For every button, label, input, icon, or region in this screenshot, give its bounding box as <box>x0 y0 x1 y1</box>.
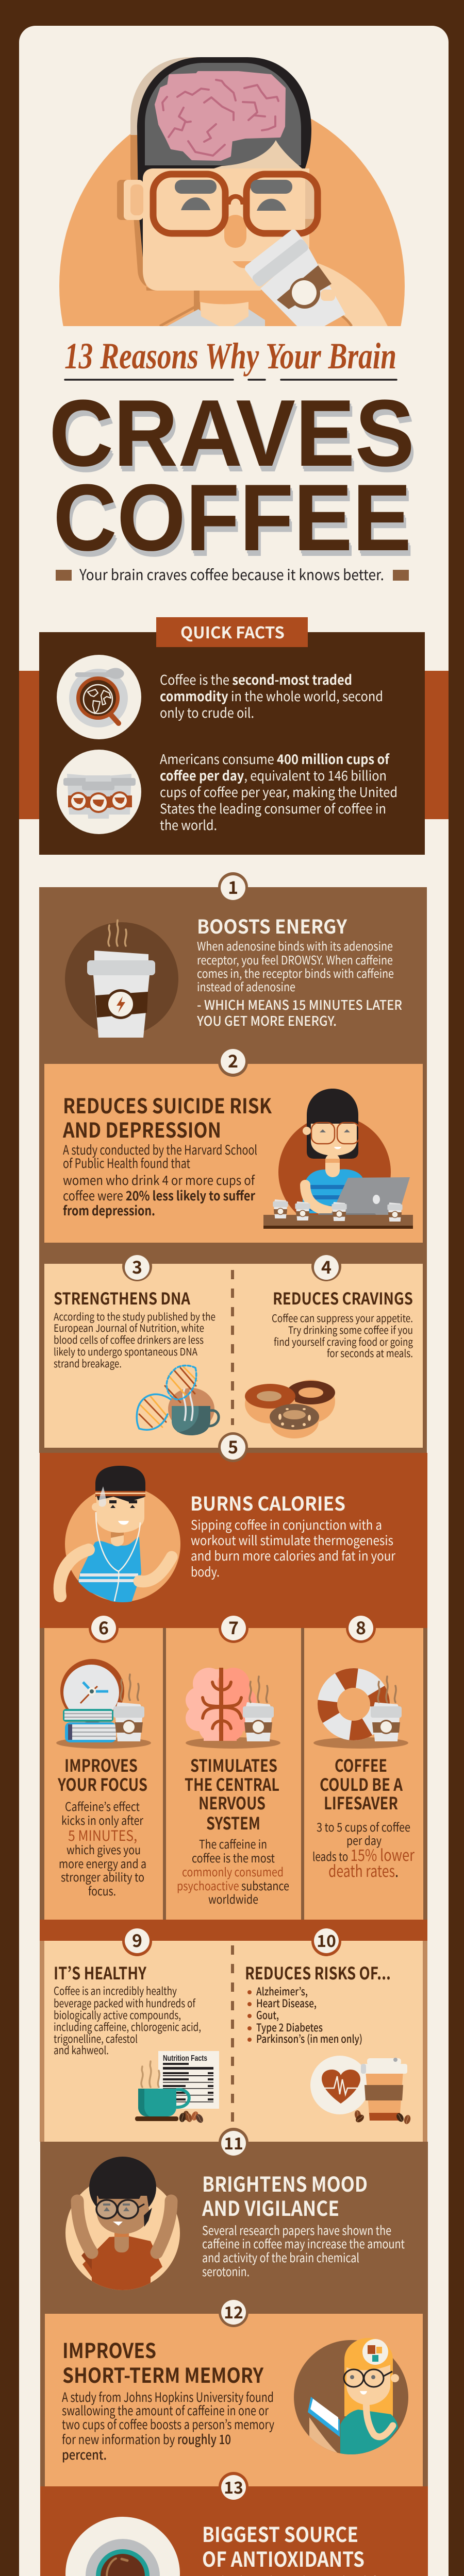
icon: world coffee cup <box>57 655 141 739</box>
heading and text: focus: IMPROVES <box>64 1752 138 1777</box>
text: strengthens DNA: blood cells of coffee drinkers are less <box>54 1332 204 1347</box>
text: burns calories: workout will stimulate thermogenesis <box>191 1531 393 1549</box>
text: reduces cravings: Try drinking some coffee if you <box>288 1322 413 1337</box>
badge 4: 4 <box>321 1253 332 1279</box>
heading and text: lifesaver: death rates. <box>328 1858 399 1882</box>
glasses <box>153 174 318 233</box>
badge 4 <box>311 1251 341 1281</box>
text: reduces risks list: Alzheimer’s, <box>256 1984 308 1999</box>
title CRAVES: CRAVES <box>52 385 417 492</box>
illustration: runner with headphones <box>60 1466 180 1602</box>
badge 8: 8 <box>356 1614 366 1639</box>
text: reduces suicide risk: AND DEPRESSION <box>62 1114 221 1144</box>
heading and text: central nervous system: THE CENTRAL <box>185 1771 279 1796</box>
columns background <box>40 1628 427 1920</box>
heading and text: central nervous system: The caffeine in <box>199 1835 267 1852</box>
text: strengthens DNA <box>54 1286 216 1370</box>
badge 5 <box>218 1432 248 1462</box>
text: strengthens DNA: strand breakage. <box>54 1355 122 1370</box>
panel: reasons 3 and 4 <box>44 1264 423 1448</box>
heading and text: focus: stronger ability to <box>61 1868 144 1885</box>
text: reduces cravings <box>272 1286 413 1360</box>
text: 400 million cups <box>160 749 397 834</box>
text: antioxidants: OF ANTIOXIDANTS <box>202 2543 364 2573</box>
heading and text: lifesaver: COULD BE A <box>320 1771 403 1796</box>
illustration: woman reading <box>294 2338 408 2454</box>
text: it's healthy: trigonelline, cafestol <box>54 2031 138 2046</box>
badge 13: 13 <box>224 2475 243 2499</box>
badge 3: 3 <box>132 1253 142 1279</box>
illustration: happy person arms up <box>65 2157 180 2293</box>
title COFFEE: COFFEE <box>53 464 411 570</box>
text: reduces risks list: Type 2 Diabetes <box>256 2020 323 2035</box>
heading and text: focus <box>57 1752 147 1899</box>
badge 1 <box>218 872 248 902</box>
text: strengthens DNA: likely to undergo spontaneous DNA <box>54 1344 198 1359</box>
text: brightens mood: AND VIGILANCE <box>202 2192 339 2222</box>
text: it's healthy: beverage packed with hundreds of <box>54 1995 196 2011</box>
text: 400 million cups: Americans consume 400 million cups of <box>160 749 390 768</box>
text: boosts energy: YOU GET MORE ENERGY. <box>196 1011 337 1030</box>
text: strengthens DNA: European Journal of Nutrition, white <box>54 1320 204 1335</box>
badge 13 <box>219 2472 248 2502</box>
panel: quick facts: QUICK FACTS <box>180 620 285 643</box>
text: second most traded: only to crude oil. <box>160 703 254 722</box>
text: antioxidants: BIGGEST SOURCE <box>202 2518 358 2548</box>
text: reduces cravings: for seconds at meals. <box>327 1345 413 1360</box>
text: second most traded: commodity in the whole world, second <box>160 686 383 705</box>
text: improves memory <box>62 2334 274 2464</box>
panel: reason 13 <box>40 2486 428 2576</box>
title CRAVES: CRAVES <box>51 383 416 489</box>
text: boosts energy: - WHICH MEANS 15 MINUTES LATER <box>197 995 402 1014</box>
badge 7: 7 <box>228 1614 239 1639</box>
badge 11 <box>219 2128 248 2158</box>
subtitle: Your brain craves coffee because it knows better. <box>79 563 384 585</box>
text: brightens mood: serotonin. <box>202 2262 250 2280</box>
text: reduces suicide risk: from depression. <box>63 1201 155 1219</box>
text: boosts energy: When adenosine binds with its adenosine <box>197 937 393 954</box>
text: brightens mood: BRIGHTENS MOOD <box>202 2168 368 2198</box>
icon: brain and cup <box>186 1668 280 1749</box>
badge 9: 9 <box>132 1927 142 1952</box>
text: it's healthy: Coffee is an incredibly healthy <box>54 1983 177 1998</box>
text: it's healthy: biologically active compounds, <box>54 2007 181 2023</box>
text: improves memory: percent. <box>62 2445 107 2464</box>
quick facts band <box>19 671 449 819</box>
icon: energy coffee cup <box>65 920 178 1038</box>
illustration: coffee cup top view <box>65 2517 180 2576</box>
text: improves memory: for new information by roughly 10 <box>62 2430 231 2448</box>
panel: reason 6 <box>44 1628 163 1920</box>
text: brightens mood <box>202 2168 405 2280</box>
badge 10 <box>311 1926 341 1956</box>
text: reduces risks list: Parkinson’s (in men only) <box>256 2031 362 2046</box>
badge 12 <box>219 2297 248 2327</box>
panel: reasons 9 and 10 <box>40 1941 427 2142</box>
heading and text: central nervous system: SYSTEM <box>206 1810 260 1835</box>
badge 6: 6 <box>98 1614 109 1639</box>
text: reduces cravings: Coffee can suppress your appetite. <box>272 1310 413 1325</box>
heading and text: lifesaver <box>312 1752 415 1882</box>
badge 8 <box>346 1613 376 1643</box>
brain <box>156 73 284 159</box>
panel: quick facts <box>39 617 425 855</box>
badge 9 <box>122 1926 152 1956</box>
text: boosts energy: receptor, you feel DROWSY. When caffeine <box>197 951 393 968</box>
heading and text: focus: YOUR FOCUS <box>57 1771 147 1796</box>
text: improves memory: swallowing the amount of caffeine in one or <box>62 2401 269 2419</box>
heading and text: lifesaver: LIFESAVER <box>324 1790 398 1815</box>
panel: reason 12 <box>45 2314 423 2486</box>
text: boosts energy: comes in, the receptor binds with caffeine <box>197 964 394 981</box>
text: boosts energy <box>196 911 402 1030</box>
text: 400 million cups: States the leading consumer of coffee in <box>160 799 386 818</box>
heading and text: central nervous system: psychoactive substance <box>177 1876 289 1894</box>
text: antioxidants <box>202 2518 415 2576</box>
heading and text: central nervous system: STIMULATES <box>190 1752 277 1777</box>
text: improves memory: IMPROVES <box>62 2334 156 2364</box>
heading and text: lifesaver: 3 to 5 cups of coffee <box>317 1818 410 1835</box>
icon: lifesaver and cup <box>313 1673 408 1749</box>
text: second most traded: Coffee is the second-most traded <box>160 670 352 689</box>
heading and text: focus: focus. <box>88 1882 116 1899</box>
hero illustration: man with brain and coffee <box>59 57 405 326</box>
text: reduces cravings: find yourself craving food or going <box>274 1334 413 1349</box>
text: it's healthy: including caffeine, chlorogenic acid, <box>54 2019 201 2035</box>
text: strengthens DNA: STRENGTHENS DNA <box>54 1286 190 1310</box>
badge 1: 1 <box>228 874 238 899</box>
text: burns calories: BURNS CALORIES <box>190 1488 345 1516</box>
panel: reason 11 background <box>40 2142 428 2486</box>
heading and text: central nervous system: coffee is the most <box>192 1849 275 1866</box>
text: burns calories: and burn more calories and fat in your <box>191 1546 395 1565</box>
text: it's healthy <box>54 1960 201 2058</box>
section background: orange 5-10 <box>40 1453 427 1941</box>
badge 3 <box>122 1251 152 1281</box>
heading and text: focus: 5 MINUTES, <box>68 1825 137 1845</box>
heading and text: lifesaver: COFFEE <box>335 1752 387 1777</box>
heading and text: focus: Caffeine’s effect <box>65 1797 140 1815</box>
text: burns calories: Sipping coffee in conjunction with a <box>191 1515 382 1534</box>
section background: brown 1-5 <box>39 887 427 1453</box>
text: brightens mood: Several research papers have shown the <box>202 2221 391 2239</box>
badge 2 <box>218 1047 248 1077</box>
text: reduces suicide risk: women who drink 4 or more cups of <box>63 1171 255 1189</box>
panel: reason 7 <box>166 1628 301 1920</box>
text: it's healthy: IT’S HEALTHY <box>54 1960 147 1985</box>
text: second most traded <box>160 670 383 722</box>
text: 400 million cups: cups of coffee per year, making the United <box>160 782 397 801</box>
text: 400 million cups: coffee per day, equivalent to 146 billion <box>160 766 387 785</box>
badge 6 <box>89 1613 119 1643</box>
text: brightens mood: and activity of the brain chemical <box>202 2248 359 2266</box>
title CRAVES: CRAVES <box>49 380 415 486</box>
illustration: nutrition facts and mug: Nutrition Facts <box>163 2054 207 2063</box>
text: reduces suicide risk: REDUCES SUICIDE RISK <box>63 1090 272 1120</box>
badge 5: 5 <box>228 1433 238 1459</box>
badge 12: 12 <box>224 2300 243 2324</box>
text: boosts energy: instead of adenosine <box>197 977 295 995</box>
text: burns calories: body. <box>191 1562 220 1581</box>
heading and text: central nervous system: worldwide <box>208 1890 258 1907</box>
text: reduces risks list <box>245 1960 391 2046</box>
illustration: nutrition facts and mug <box>135 2051 219 2124</box>
badge 2: 2 <box>228 1047 238 1073</box>
text: improves memory: A study from Johns Hopkins University found <box>62 2387 274 2406</box>
text: boosts energy: BOOSTS ENERGY <box>197 911 347 939</box>
illustration: donuts <box>245 1380 335 1438</box>
text: burns calories <box>190 1488 395 1581</box>
coffee cup at mouth <box>243 228 345 330</box>
heading and text: central nervous system <box>177 1752 289 1907</box>
text: brightens mood: caffeine in coffee may increase the amount <box>202 2234 405 2252</box>
badge 11: 11 <box>224 2131 243 2155</box>
heading and text: focus: more energy and a <box>59 1854 146 1872</box>
heading and text: central nervous system: NERVOUS <box>198 1790 266 1815</box>
heading and text: focus: which gives you <box>67 1840 141 1858</box>
text: strengthens DNA: According to the study published by the <box>54 1309 216 1324</box>
title COFFEE: COFFEE <box>56 470 414 576</box>
text: reduces suicide risk: A study conducted by the Harvard School <box>63 1140 257 1159</box>
badge 7 <box>219 1613 248 1643</box>
illustration: DNA and coffee cup <box>137 1365 219 1435</box>
badge 10: 10 <box>317 1928 336 1952</box>
text: reduces cravings: REDUCES CRAVINGS <box>273 1286 413 1310</box>
text: reduces suicide risk: coffee were 20% less likely to suffer <box>63 1186 255 1205</box>
illustration: heart and cup <box>310 2056 411 2125</box>
text: improves memory: SHORT-TERM MEMORY <box>62 2359 264 2389</box>
text: reduces risks list: REDUCES RISKS OF... <box>245 1960 391 1985</box>
text: it's healthy: and kahweol. <box>54 2042 109 2058</box>
illustration: person with laptop and cups <box>263 1089 413 1229</box>
heading and text: lifesaver: leads to 15% lower <box>312 1842 415 1866</box>
text: reduces risks list: Gout, <box>256 2007 279 2023</box>
text: reduces suicide risk <box>62 1090 272 1219</box>
heading and text: focus: kicks in only after <box>61 1811 143 1828</box>
panel: reason 2 <box>44 1064 423 1243</box>
panel: reason 8 <box>304 1628 423 1920</box>
text: reduces suicide risk: of Public Health found that <box>63 1154 190 1172</box>
heading and text: central nervous system: commonly consumed <box>182 1862 284 1880</box>
text: reduces risks list: Heart Disease, <box>256 1995 317 2011</box>
icon: three cups with USA <box>57 750 141 834</box>
title COFFEE: COFFEE <box>55 467 413 573</box>
heading and text: lifesaver: per day <box>346 1831 382 1849</box>
icon: clock and books <box>56 1659 151 1749</box>
text: 400 million cups: the world. <box>160 815 217 834</box>
text: improves memory: two cups of coffee boosts a person’s memory <box>62 2415 274 2433</box>
